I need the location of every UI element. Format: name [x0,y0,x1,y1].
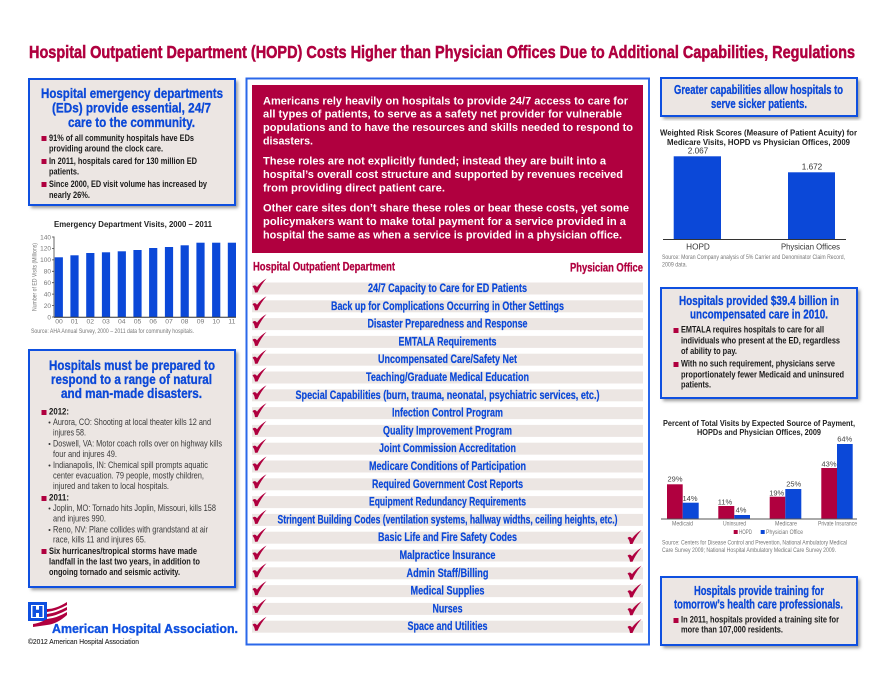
bar chart: emergency department visits: 120 [40,246,51,253]
panel: training [661,577,860,648]
bullet list: emergency departments: providing around the clock care. [49,144,163,154]
list: disasters [42,407,222,578]
comparison table rows: Required Government Cost Reports [372,479,523,491]
bar chart: emergency department visits: 10 [212,318,220,326]
bar chart: emergency department visits: 40 [44,291,51,298]
heading: disasters [49,358,215,401]
bar chart: emergency department visits: 04 [118,318,126,326]
comparison table rows: Infection Control Program [392,408,503,420]
heading: disasters: Hospitals must be prepared to [49,358,215,373]
bar chart: weighted risk scores [660,128,858,269]
bullet list: emergency departments [42,133,208,201]
bar chart: expected source of payment [661,418,857,554]
bar chart: emergency department visits: Emergency Department Visits, 2000 – 2011 [54,219,212,229]
panel: center comparison [246,78,649,644]
bar chart: emergency department visits: 140 [40,234,51,241]
heading: disasters: and man-made disasters. [61,386,202,401]
panel: uncompensated care: of ability to pay. [681,346,737,357]
bar chart: expected source of payment: HOPD [739,529,752,536]
bar chart: emergency department visits: 02 [87,318,94,326]
bar chart: expected source of payment: Medicare [775,521,797,528]
bar chart: expected source of payment: 29% [667,475,683,484]
comparison table rows [252,282,643,633]
column header: physician office: Physician Office [570,260,643,274]
list: disasters: Aurora, CO: Shooting at local theater kills 12 and [53,417,211,428]
bar chart: emergency department visits: 80 [44,269,51,276]
bar chart: emergency department visits: 06 [149,318,157,326]
list: disasters: 2011: [49,493,69,504]
red text block: all types of patients, to serve as a safety net provider for vulnerable [263,109,622,121]
bar chart: expected source of payment: 64% [837,434,853,443]
panel: uncompensated care: With no such requirement, physicians serve [681,359,835,370]
comparison table rows: Stringent Building Codes (ventilation systems, hallway widths, ceiling heights, etc.) [278,514,618,526]
comparison table rows: Uncompensated Care/Safety Net [378,354,517,366]
list: disasters: Indianapolis, IN: Chemical spill prompts aquatic [53,460,208,471]
column header: hospital outpatient department: Hospital Outpatient Department [253,262,395,274]
bar chart: emergency department visits: 00 [55,318,63,326]
bar chart: expected source of payment: 19% [769,488,785,497]
bar chart: expected source of payment: HOPDs and Physician Offices, 2009 [697,427,821,437]
red text block: Americans rely heavily on hospitals to provide 24/7 access to care for [263,95,628,107]
panel: disasters [29,350,238,590]
bar chart: emergency department visits: 60 [44,280,51,287]
list: disasters: ongoing tornado and seismic activity. [49,567,180,578]
panel: emergency departments [29,79,238,208]
comparison table rows: Special Capabilities (burn, trauma, neonatal, psychiatric services, etc.) [296,390,600,402]
bar chart: emergency department visits: 11 [228,318,236,326]
bar chart: emergency department visits: 01 [71,318,78,326]
heading: emergency departments: (EDs) provide essential, 24/7 [52,100,211,116]
bar chart: emergency department visits: Source: AHA Annual Survey, 2000 – 2011 data for community hospitals. [31,328,194,335]
comparison table rows: Basic Life and Fire Safety Codes [378,532,517,544]
comparison table rows: Nurses [432,603,462,615]
icons: hospital check marks [252,278,266,631]
panel: uncompensated care: Hospitals provided $39.4 billion in [679,294,839,308]
bar chart: emergency department visits: 0 [47,314,51,321]
bar chart: emergency department visits [31,219,236,335]
red text block: populations and to have the resources and skills needed to respond to [263,122,633,134]
copyright: ©2012 American Hospital Association [28,637,139,646]
red text block: policymakers want to make total payment for a service provided in a [263,216,627,228]
list: disasters: Reno, NV: Plane collides with grandstand at air [53,525,208,536]
list: disasters: injured and taken to local hospitals. [53,481,169,492]
panel: training: Hospitals provide training for [694,584,824,598]
bar chart: emergency department visits: 05 [134,318,141,326]
logo: American Hospital Association [30,602,238,636]
bar chart: emergency department visits: 07 [165,318,173,326]
bar chart: emergency department visits: 09 [197,318,204,326]
bullet list: emergency departments: patients. [49,166,79,178]
icons: physician office check marks [628,530,642,633]
bar chart: emergency department visits: 03 [102,318,110,326]
bar chart: emergency department visits: 20 [44,303,51,310]
list: disasters: landfall in the last two years, in addition to [49,557,200,568]
comparison table rows: Medical Supplies [410,586,484,598]
bar chart: weighted risk scores: Medicare Visits, HOPD vs Physician Offices, 2009 [667,137,850,147]
bar chart: emergency department visits: 100 [40,257,51,264]
comparison table rows: Admin Staff/Billing [406,568,488,580]
bar chart: expected source of payment: Private Insurance [818,521,857,528]
panel: uncompensated care: patients. [681,380,711,391]
list: disasters: Six hurricanes/tropical storms have made [49,546,197,557]
logo: American Hospital Association: American Hospital Association. [52,621,238,636]
list: disasters: center evacuation. 79 people, mostly children, [53,471,204,482]
bar chart: expected source of payment: Medicaid [672,521,693,528]
comparison table rows: 24/7 Capacity to Care for ED Patients [368,283,527,295]
panel: uncompensated care: uncompensated care in 2010. [690,308,828,322]
panel: greater capabilities [661,78,860,119]
bullet list: emergency departments: nearly 26%. [49,190,90,201]
list: disasters: Joplin, MO: Tornado hits Joplin, Missouri, kills 158 [53,503,216,514]
bullet list: emergency departments: 91% of all community hospitals have EDs [49,133,194,144]
red text block: from providing direct patient care. [263,182,445,194]
comparison table rows: Malpractice Insurance [400,550,496,562]
heading: disasters: respond to a range of natural [51,372,212,387]
heading: emergency departments [41,86,223,130]
list: disasters: injures 58. [53,428,86,439]
heading: emergency departments: Hospital emergency departments [41,86,223,101]
bar chart: expected source of payment: 4% [736,506,747,515]
panel: uncompensated care [661,288,860,401]
red text block [252,85,643,253]
bar chart: expected source of payment: 43% [821,459,837,468]
red text block: Other care sites don’t share these roles or bear these costs, yet some [263,203,629,215]
bar chart: weighted risk scores: 2009 data. [662,262,687,269]
bar chart: expected source of payment: Physician Office [766,529,803,536]
panel: training: more than 107,000 residents. [681,625,783,636]
comparison table rows: Equipment Redundancy Requirements [369,497,526,509]
comparison table rows: Back up for Complications Occurring in Other Settings [331,301,564,313]
comparison table rows: EMTALA Requirements [398,336,496,348]
comparison table rows: Teaching/Graduate Medical Education [366,372,529,384]
heading: emergency departments: care to the community. [68,115,195,130]
bar chart: expected source of payment: Uninsured [723,521,746,528]
comparison table rows: Quality Improvement Program [383,425,512,437]
list: disasters: four and injures 49. [53,449,117,460]
bar chart: expected source of payment: 14% [682,494,698,503]
bar chart: weighted risk scores: Physician Offices [781,242,840,252]
comparison table rows: Medicare Conditions of Participation [369,461,526,473]
bar chart: weighted risk scores: Weighted Risk Scores (Measure of Patient Acuity) for [660,128,858,138]
list: disasters: 2012: [49,407,69,418]
bar chart: weighted risk scores: 2.067 [688,146,709,156]
red text block: hospital’s overall cost structure and supported by revenues received [263,169,623,181]
bullet list: emergency departments: Since 2000, ED visit volume has increased by [49,179,208,190]
list: disasters: race, kills 11 and injures 65. [53,535,146,546]
bar chart: emergency department visits: 08 [181,318,189,326]
bar chart: expected source of payment: 25% [786,480,802,489]
comparison table rows: Disaster Preparedness and Response [368,319,528,331]
red text block: These roles are not explicitly funded; instead they are built into a [263,156,607,168]
red text block: hospital the same as when a service is provided in a physician office. [263,229,622,241]
comparison table rows: Joint Commission Accreditation [379,443,516,455]
bar chart: weighted risk scores: 1.672 [802,162,823,172]
bar chart: weighted risk scores: HOPD [686,242,710,252]
list: disasters: and injures 990. [53,514,106,525]
red text block: disasters. [263,135,313,147]
comparison table rows: Space and Utilities [408,621,488,633]
bullet list: emergency departments: In 2011, hospitals cared for 130 million ED [49,156,197,167]
bar chart: emergency department visits: Number of ED Visits (Millions) [32,243,38,311]
panel: greater capabilities: serve sicker patients. [711,97,807,111]
panel: training: In 2011, hospitals provided a training site for [681,614,839,625]
list: disasters: Doswell, VA: Motor coach rolls over on highway kills [53,439,222,450]
panel: uncompensated care: EMTALA requires hospitals to care for all [681,325,824,336]
bar chart: expected source of payment: 11% [718,498,733,507]
